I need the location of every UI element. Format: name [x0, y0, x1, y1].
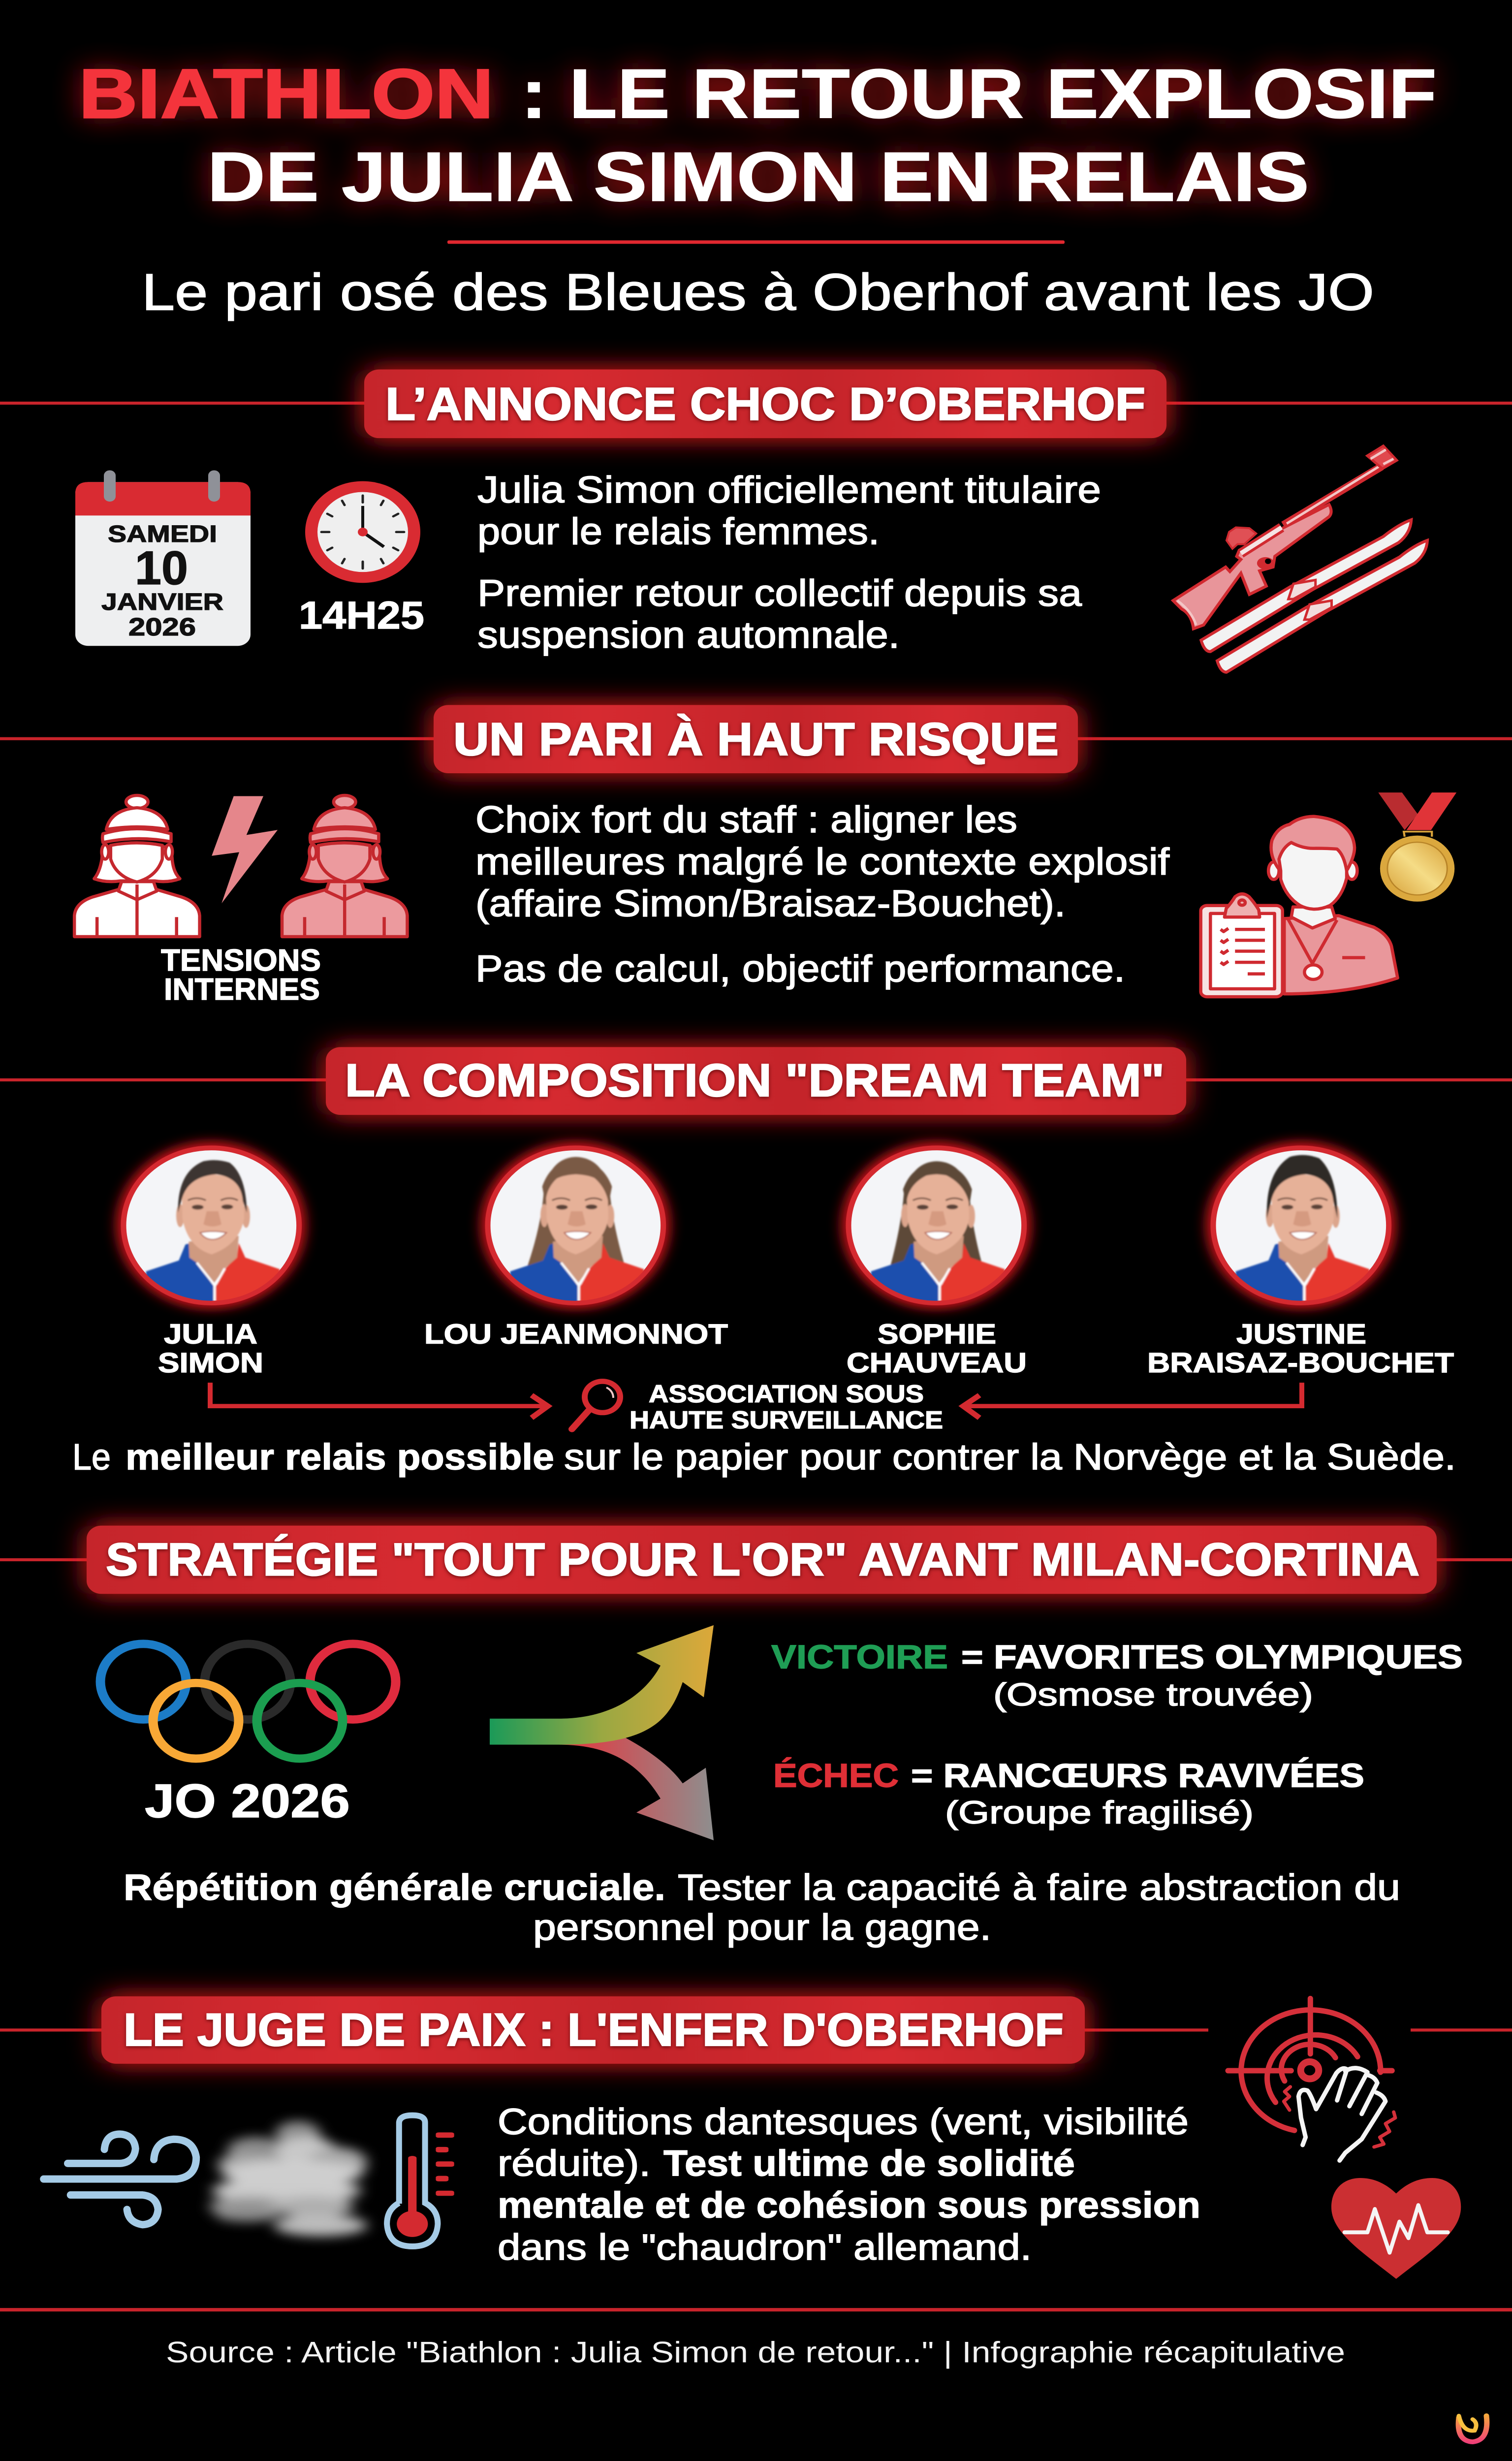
text block: pari: (affaire Simon/Braisaz-Bouchet). — [475, 883, 1066, 924]
callout: association sous haute surveillance: HAUTE SURVEILLANCE — [630, 1406, 943, 1434]
icon: two athletes in tension — [74, 795, 407, 937]
outcome: échec: = RANCŒURS RAVIVÉES — [911, 1757, 1364, 1794]
icon: calendar: 10 — [135, 541, 188, 594]
icon: clock — [305, 481, 420, 583]
text block: conditions dantesques — [498, 2101, 1200, 2268]
portrait: Julia Simon — [118, 1143, 305, 1308]
text block: conditions dantesques: réduite). — [498, 2143, 651, 2184]
icon: wind — [44, 2134, 196, 2225]
heading: le juge de paix: LE JUGE DE PAIX : L'ENFER D'OBERHOF — [124, 2004, 1064, 2055]
outcome: victoire: = FAVORITES OLYMPIQUES — [961, 1638, 1463, 1675]
icon: thermometer — [387, 2115, 454, 2246]
text block: meilleur relais: Le — [72, 1436, 111, 1478]
text block: conditions dantesques: mentale et de cohésion sous pression — [498, 2184, 1200, 2225]
text block: pari — [475, 799, 1169, 990]
heading: stratégie tout pour l'or: STRATÉGIE "TOUT POUR L'OR" AVANT MILAN-CORTINA — [106, 1534, 1419, 1585]
outcome: victoire — [771, 1638, 1463, 1712]
icon: calendar — [75, 470, 251, 646]
athlete names — [158, 1318, 1454, 1378]
outcome: échec: (Groupe fragilisé) — [945, 1795, 1254, 1830]
icon: olympic rings — [100, 1644, 396, 1759]
outcome: victoire: (Osmose trouvée) — [993, 1676, 1313, 1712]
callout: association sous haute surveillance: ASSOCIATION SOUS — [649, 1380, 924, 1408]
title: : LE RETOUR EXPLOSIF — [521, 55, 1437, 133]
section: stratégie tout pour l'or — [0, 1526, 1512, 1948]
section: un pari à haut risque — [0, 705, 1512, 1006]
text block: répétition générale: Répétition générale cruciale. — [124, 1867, 665, 1908]
label: JO 2026: JO 2026 — [145, 1774, 350, 1828]
arrow: victory path — [490, 1625, 714, 1745]
arrow: right connector — [963, 1383, 1302, 1418]
icon: lightning bolt — [212, 796, 278, 903]
title: BIATHLON — [79, 55, 494, 133]
icon: heart with pulse — [1331, 2178, 1461, 2279]
subtitle: Le pari osé des Bleues à Oberhof avant les JO — [142, 263, 1374, 321]
icon: magnifier — [572, 1381, 620, 1429]
text block: annonce: suspension automnale. — [477, 614, 900, 656]
text block: meilleur relais — [72, 1436, 1456, 1478]
section: le juge de paix — [0, 1996, 1512, 2279]
text block: annonce: Julia Simon officiellement titulaire — [477, 469, 1101, 511]
icon: calendar: SAMEDI — [108, 520, 217, 547]
outcome: échec — [773, 1757, 1364, 1830]
section: l'annonce choc — [0, 370, 1512, 672]
portrait: Justine Braisaz-Bouchet — [1207, 1143, 1394, 1308]
label: tensions internes: TENSIONS — [161, 943, 321, 977]
athlete names: SIMON — [158, 1347, 263, 1378]
time label: 14H25 — [299, 594, 424, 637]
icon: coach with clipboard — [1201, 817, 1398, 997]
text block: pari: Pas de calcul, objectif performance. — [475, 948, 1125, 990]
outcome: échec: ÉCHEC — [773, 1757, 899, 1794]
arrow: left connector — [210, 1383, 548, 1418]
text block: répétition générale: personnel pour la gagne. — [533, 1907, 991, 1948]
label: tensions internes: INTERNES — [164, 972, 320, 1006]
arrow: failure path — [559, 1734, 714, 1840]
icon: rifle and skis — [1173, 446, 1427, 672]
title: : LE RETOUR EXPLOSIF — [521, 55, 1437, 133]
athlete names: LOU JEANMONNOT — [424, 1318, 728, 1350]
outcome: victoire: VICTOIRE — [771, 1638, 948, 1675]
heading: la composition dream team: LA COMPOSITION "DREAM TEAM" — [345, 1055, 1165, 1106]
icon: calendar: 2026 — [128, 612, 196, 641]
icon: calendar: JANVIER — [101, 588, 223, 615]
text block: répétition générale — [124, 1867, 1400, 1948]
text block: pari: Choix fort du staff : aligner les — [475, 799, 1017, 841]
text block: conditions dantesques: dans le "chaudron" allemand. — [498, 2227, 1032, 2268]
text block: meilleur relais: sur le papier pour contrer la Norvège et la Suède. — [564, 1436, 1456, 1478]
text block: annonce: Premier retour collectif depuis sa — [477, 573, 1082, 614]
heading: l'annonce choc d'Oberhof: L’ANNONCE CHOC D’OBERHOF — [385, 379, 1145, 430]
callout: association sous haute surveillance — [630, 1380, 943, 1434]
source footer: Source : Article "Biathlon : Julia Simon de retour..." | Infographie récapitulative — [166, 2335, 1345, 2369]
title: DE JULIA SIMON EN RELAIS — [207, 138, 1309, 216]
text block: annonce: pour le relais femmes. — [477, 511, 880, 552]
section: composition dream team — [0, 1047, 1512, 1478]
text block: répétition générale: Tester la capacité à faire abstraction du — [678, 1867, 1400, 1908]
athlete names: BRAISAZ-BOUCHET — [1147, 1347, 1454, 1378]
icon: target and trembling hand — [1228, 1998, 1395, 2161]
title — [79, 55, 1437, 216]
athlete names: CHAUVEAU — [847, 1347, 1027, 1378]
text block: annonce — [477, 469, 1101, 656]
icon: gold medal — [1378, 792, 1456, 902]
text block: conditions dantesques: Conditions dantesques (vent, visibilité — [498, 2101, 1189, 2142]
icon: fog cloud — [209, 2121, 367, 2236]
athlete names: JULIA — [164, 1318, 257, 1350]
icon: athlete left — [74, 795, 200, 937]
portrait: Sophie Chauveau — [843, 1143, 1030, 1308]
icon: corner logo — [1458, 2416, 1487, 2442]
text block: meilleur relais: meilleur relais possible — [126, 1436, 554, 1478]
label: tensions internes — [161, 943, 321, 1006]
icon: athlete right — [282, 795, 407, 937]
text block: conditions dantesques: Test ultime de solidité — [663, 2143, 1075, 2184]
text block: pari: meilleures malgré le contexte explosif — [475, 841, 1169, 883]
title: BIATHLON — [79, 55, 494, 133]
athlete names: JUSTINE — [1236, 1318, 1366, 1350]
portrait: Lou Jeanmonnot — [482, 1143, 669, 1308]
title: DE JULIA SIMON EN RELAIS — [207, 138, 1309, 216]
heading: un pari à haut risque: UN PARI À HAUT RISQUE — [453, 714, 1059, 765]
athlete names: SOPHIE — [878, 1318, 996, 1350]
